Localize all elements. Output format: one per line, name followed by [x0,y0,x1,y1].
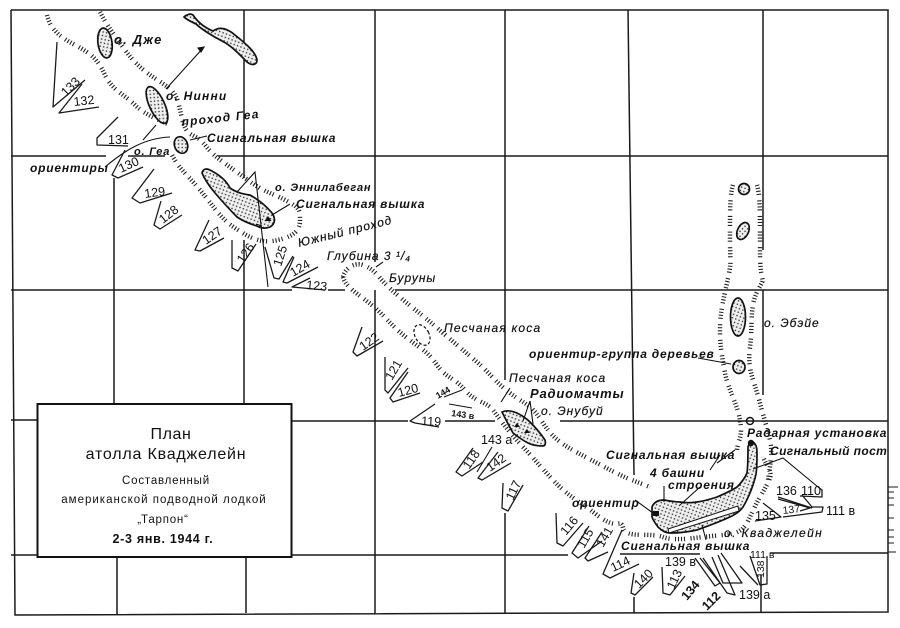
berth 140: 140 [631,566,656,591]
island: Ninni [142,84,172,126]
berth 125 [265,244,293,279]
island: Ebye small north [734,221,752,241]
subheading: Tarpon: „Тарпон“ [137,514,189,526]
berth 132 [59,84,99,113]
icon: landmark on Kwajalein [653,511,659,516]
berth 130: 130 [116,154,141,176]
berth 135 and 137 [755,503,823,523]
berth 114: 114 [608,554,632,575]
island: Ebye south [733,360,745,374]
label: south pass: Южный проход [296,213,394,250]
heading: atoll name: атолла Кваджелейн [86,446,246,463]
berth 142 [478,451,511,480]
runway strip [668,506,739,533]
berth 134: 134 [679,578,703,603]
berth 126: 126 [234,241,257,266]
label: sand spit 2: Песчаная коса [509,371,606,385]
island: Gea [172,135,190,155]
berth 119 [410,404,442,429]
berth 112 [699,553,742,613]
berth 134 [679,555,735,603]
berth 127: 127 [200,224,225,247]
island: Enubuy [502,411,545,446]
island: Ebye [730,298,746,336]
label: Ennylabegan: о. Эннилабеган [275,182,371,194]
berth 135 and 137: 135 [755,509,776,523]
berth 133: 133 [58,74,83,99]
label: four towers: 4 башни [649,466,705,480]
berth 123 [292,278,328,294]
leader lines [105,47,818,540]
label: landmark: ориентир [572,496,640,510]
berth 124: 124 [288,257,313,280]
berth 132: 132 [73,93,95,109]
berth 117 [502,478,524,511]
small numeric labels [434,385,775,602]
island: Kwajalein [652,442,757,533]
berth 141 [585,524,616,561]
berth 131: 131 [108,133,129,147]
berth 118: 118 [460,447,483,472]
icon: tower on Ennylabegan [264,216,272,221]
islands [96,14,757,533]
label 143 v: 143 в [451,408,475,421]
berth 133 [53,42,85,107]
label: radio masts: Радиомачты [530,386,624,401]
label: sand spit 1: Песчаная коса [444,321,541,335]
berth 123: 123 [306,278,328,294]
island: Ebye group [738,184,750,194]
reef: northern segment [47,12,300,241]
berth 138: 138 [755,560,767,578]
berth 124 [283,257,318,283]
date: 2-3 янв. 1944 г. [113,532,213,546]
label: o. Ebye: о. Эбэйе [764,316,820,330]
label: Gea pass: проход Геа [181,107,260,129]
berth 116: 116 [558,514,581,538]
label 143 a: 143 а [481,433,512,447]
label: o. Dzhe: о. Дже [114,32,163,47]
berth 138 [740,556,767,585]
label 144: 144 [434,385,452,401]
reef: eastern segment (Ebye) [720,185,771,480]
berth 117: 117 [503,478,524,502]
berth 125: 125 [271,244,290,268]
island: Dzhe [96,27,114,59]
berth 122 [353,327,383,356]
berth 135 and 137: 137 [782,503,801,517]
berth 136 110: 136 [776,484,797,498]
berth 141: 141 [593,524,616,550]
berth 136 110: 110 [801,484,821,498]
berth 129 [132,169,172,203]
label: signal tower 2: Сигнальная вышка [296,197,425,211]
berth 120: 120 [396,381,420,400]
berth 114 [603,530,639,578]
berth 115 [572,526,602,558]
berth 142: 142 [484,451,509,474]
berth 131 [97,117,129,147]
icon: signal towers on Enubuy [514,423,530,433]
label: landmark trees: ориентир-группа деревьев [529,347,715,361]
label: o. Ninni: о. Нинни [166,89,227,103]
island: northern elongated [184,14,257,64]
label 139 v: 139 в [665,555,696,569]
place labels [30,32,887,553]
berth 129: 129 [143,184,166,201]
berth 130 [112,150,143,178]
label 139 a: 139 а [739,588,770,602]
label: depth: Глубина 3 ¹/₄ [327,249,411,263]
island: Ennylabegan [202,169,274,228]
berth 127 [195,220,225,251]
berth 121: 121 [382,357,405,382]
heading: plan: План [151,426,191,443]
label: signal post: Сигнальный пост [770,444,887,458]
sand spit outline [411,322,433,348]
label: o. Kwajalein: о. Кваджелейн [724,526,823,540]
berth 116 [556,513,583,546]
label: breakers: Буруны [389,271,436,285]
subheading: american submarine: американской подводной лодкой [61,494,267,506]
label: buildings: строения [668,478,735,492]
berth 115: 115 [574,526,597,550]
title panel [38,404,292,557]
reef: middle segment [343,264,770,539]
label: radar: Радарная установка [747,426,887,440]
berth 128: 128 [156,202,181,226]
label: signal tower 4: Сигнальная вышка [621,539,750,553]
label: o. Gea: о. Геа [134,146,170,158]
label: signal tower 3: Сигнальная вышка [606,448,735,462]
label: signal tower 1: Сигнальная вышка [207,131,336,145]
icon: small tower circle [746,418,754,424]
berth 120 [390,372,420,402]
berth 122: 122 [357,330,382,353]
subheading: compiled: Составленный [122,475,210,487]
berth 113: 113 [664,567,685,591]
label 111 v lower: 111 в [750,549,775,561]
label: landmarks: ориентиры [30,161,109,175]
label: o. Enubuy: о. Энубуй [541,404,604,418]
berth 111 v: 111 в [826,504,855,518]
berth 112: 112 [699,589,723,613]
icon: radar marker [748,440,754,446]
berth 119: 119 [421,414,442,429]
berth 121 [382,357,408,393]
berth 136 110 [776,484,822,508]
